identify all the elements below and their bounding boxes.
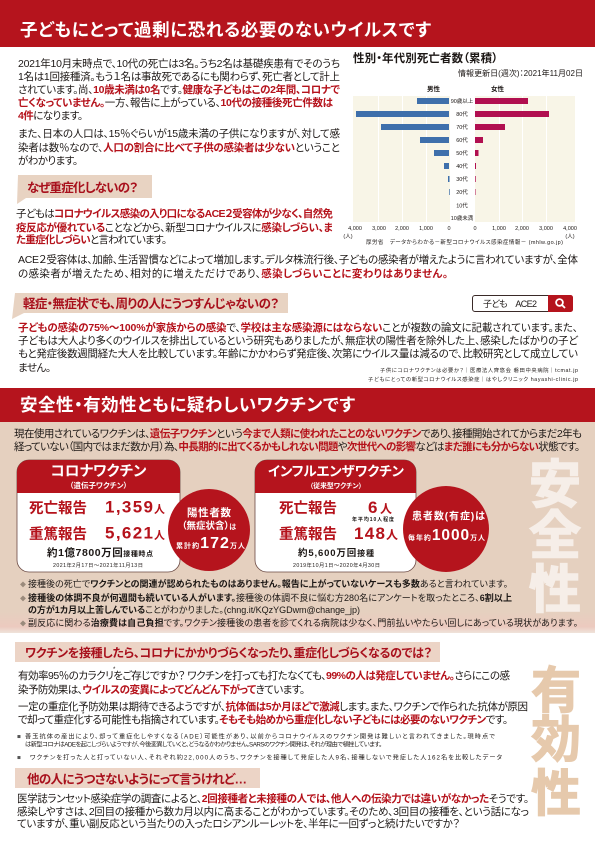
legend labels (427, 84, 504, 93)
axis labels: 0 (447, 226, 451, 232)
vertical label: safety (529, 457, 581, 620)
text block: deaths among teens: されています。尚、10歳未満は0名です。健康な子どもはこの2年間、コロナで (18, 83, 340, 96)
bubble: not to infect others (15, 768, 260, 788)
bubble: not to infect others: 他の人にうつさないようにって言うけれど… (27, 772, 247, 786)
text block: household infection: もと発症後数週間経た大人を比較しています。年齢にかかわらず発症後、次第にウイルス量は減るので、比較研究として成立してい (18, 347, 578, 360)
legend labels: 女性 (491, 84, 504, 93)
vertical label: efficacy: 性 (531, 766, 581, 822)
age labels (451, 97, 474, 222)
card: influenza vaccine: 死亡報告 (279, 499, 337, 517)
text block: population ratio: 染者は数％なので、人口の割合に比べて子供の感染者は少ないということ (18, 141, 340, 154)
card: influenza vaccine: （従来型ワクチン） (310, 481, 362, 490)
text block: deaths among teens: 1名は1回接種済。もう１名は事故死であるにも関わらず、死亡者として計上 (18, 70, 340, 83)
vertical label: safety: 安 (529, 457, 581, 515)
card: influenza vaccine: 人 (386, 528, 398, 542)
text block: household infection: 子どもの感染の75%～100%が家族からの感染で、学校は主な感染源にはならないことが複数の論文に記載されています。また、 (18, 321, 578, 334)
age labels: 10代 (456, 202, 468, 210)
vertical label: safety: 全 (529, 508, 581, 566)
circle: positive cases (168, 489, 250, 571)
text block: population ratio: また、日本の人口は、15％ぐらいが15歳未満の子供になりますが、対して感 (18, 127, 340, 140)
bullet list: vaccine concerns: 接種後の体調不良が何週間も続いている人がいます。接種後の体調不良に悩む方280名にアンケートを取ったところ、6割以上 (28, 592, 512, 603)
bullet list: vaccine concerns: ◆ (20, 621, 26, 628)
footnote markers: * (113, 667, 116, 673)
age labels: 50代 (456, 149, 468, 157)
circle: patients: 毎年約1000万人 (408, 527, 485, 544)
footnote markers (82, 667, 116, 718)
bullet list: vaccine concerns: 接種後の死亡でワクチンとの関連が認められたものはありません。報告に上がっていないケースも多数あると言われています。 (28, 578, 508, 589)
circle: positive cases: 累計約172万人 (176, 535, 245, 552)
card: corona vaccine: 人 (154, 530, 165, 542)
card: influenza vaccine: 約5,600万回接種 (298, 547, 374, 559)
circle: patients (403, 486, 489, 572)
text block: efficacy rate (18, 667, 528, 726)
age labels: 80代 (456, 110, 468, 118)
axis labels: 0 (473, 226, 477, 232)
card: influenza vaccine: 年平均10人程度 (352, 516, 394, 523)
bullet list: vaccine concerns: ◆ (20, 582, 26, 589)
text block: household infection: 子どもは大人より多くのウイルスを排出しているという研究もありましたが、無症状の陽性者を除外した上、感染したばかりの子ど (18, 334, 579, 347)
circle: positive cases: 陽性者数 (187, 506, 232, 519)
references (368, 366, 578, 383)
plot background (353, 96, 575, 222)
card: influenza vaccine: 148 (354, 524, 385, 543)
axis labels: 4,000 (563, 226, 577, 232)
chart title: 性別・年代別死亡者数（累積） (353, 51, 498, 65)
references: 子どもにとっての新型コロナウイルス感染症｜はやしクリニック hayashi-clinic.jp (368, 375, 578, 383)
text block: Lancet study (17, 792, 529, 830)
axis labels: (人) (343, 234, 353, 240)
chart source: 厚労省 データからわかる－新型コロナウイルス感染症情報－ (mhlw.go.jp) (366, 238, 563, 246)
card: corona vaccine: （遺伝子ワクチン） (70, 480, 127, 490)
axis labels: 2,000 (515, 226, 529, 232)
axis labels: 3,000 (372, 226, 386, 232)
section header: children (0, 0, 595, 47)
text block: population ratio: がわかります。 (18, 154, 78, 167)
card: influenza vaccine: 重篤報告 (279, 525, 337, 543)
card: influenza vaccine: 人 (380, 502, 392, 516)
text block: household infection: ません。 (18, 362, 51, 374)
text block: deaths among teens: 2021年10月末時点で、10代の死亡は3名。うち2名は基礎疾患有でそのうち (18, 57, 340, 70)
bubble: why not severe: なぜ重症化しないの？ (27, 180, 138, 195)
text block: ACE2 receptors in children: 疫反応が優れていることなどから、新型コロナウイルスに感染しづらい、ま (16, 221, 333, 234)
age labels: 60代 (456, 136, 468, 144)
text block: vaccine intro (14, 427, 582, 453)
card: influenza vaccine: インフルエンザワクチン (268, 464, 404, 479)
bullet list: vaccine concerns: 副反応に関わる治療費は自己負担です。ワクチン接種後の患者を診てくれる病院は少なく、門前払いやたらい回しにあっている現状があります。 (28, 617, 578, 628)
text block: efficacy rate: で却って重症化する可能性も指摘されています。そもそも始めから重症化しない子どもには必要のないワクチンです。 (18, 713, 508, 726)
chart: deaths by sex and age (343, 51, 583, 246)
icon: magnifier (556, 299, 565, 308)
bubble: does vaccine prevent severity (15, 642, 440, 662)
text block: efficacy rate: 染予防効果は、ウイルスの変異によってどんどん下がってきています。 (18, 683, 305, 696)
bullet list: vaccine concerns (20, 578, 578, 628)
card: corona vaccine: コロナワクチン (51, 463, 146, 480)
age labels: 30代 (456, 175, 468, 183)
card: influenza vaccine: 6 (368, 498, 377, 517)
text block: ACE2 and age: ACE２受容体は、加齢、生活習慣などによって増加します。デルタ株流行後、子どもの感染者が増えたように言われていますが、全体 (18, 253, 578, 266)
text block: vaccine intro: 現在使用されているワクチンは、遺伝子ワクチンという今まで人類に使われたことのないワクチンであり、接種開始されてからまだ2年も (14, 427, 582, 440)
age labels: 20代 (456, 188, 468, 196)
text block: efficacy rate: 有効率95％のカラクリをご存じですか？ ワクチンを打っても打たなくても、99%の人は発症していません。さらにこの感 (18, 669, 510, 682)
age labels: 40代 (456, 162, 468, 170)
references: 子供にコロナワクチンは必要か？｜医療法人齊悠会 磐田中央病院｜tcmat.jp (380, 366, 578, 374)
vertical label: efficacy: 有 (531, 663, 581, 719)
text block: population ratio (18, 127, 340, 167)
search box: 子ども ACE2 (483, 299, 537, 309)
bullet list: vaccine concerns: の方が1カ月以上苦しんでいることがわかりました。(chng.it/KQzYGDwm@change_jp) (28, 604, 360, 615)
text block: ACE2 and age: の感染者が増えたため、相対的に増えただけであり、感染しづらいことに変わりはありません。 (18, 267, 448, 280)
female bars (475, 98, 549, 195)
axis labels: (人) (565, 234, 575, 240)
bubble: mild cases transmit (12, 293, 288, 319)
text block: Lancet study: 感染しやすさは、2回目の接種から数カ月以内に高まることがわかっています。そのため、3回目の接種を、という話になっ (17, 805, 529, 818)
footnotes (17, 732, 502, 762)
search box (472, 295, 573, 312)
circle: patients: 患者数(有症)は (412, 510, 485, 522)
male bars (356, 98, 450, 195)
card: corona vaccine (17, 460, 180, 572)
vertical label: safety: 性 (529, 562, 581, 620)
text block: ACE2 receptors in children (16, 207, 334, 246)
footnotes: ■ (17, 734, 21, 740)
text block: ACE2 receptors in children: 子どもはコロナウイルス感染の入り口になるACE２受容体が少なく、自然免 (16, 207, 334, 220)
text block: household infection (18, 321, 579, 374)
age labels: 70代 (456, 123, 468, 131)
card: corona vaccine: 約1億7800万回接種時点 (47, 546, 153, 559)
footnotes: ワクチンを打った人と打っていない人、それぞれ約22,000人のうち、ワクチンを接種して発症した人9名、接種しないで発症した人162名を比較したデータ (30, 754, 502, 762)
section background: safety (0, 422, 595, 633)
footnotes: は新型コロナはADEを起こしづらいようですが、今後変異していくと、どうなるかわかりません。SARSのワクチン開発は、それが理由で頓挫しています。 (25, 740, 382, 748)
footnotes: 善玉抗体の産出により、却って重症化しやすくなる〔ADE〕可能性があり、以前からコロナウイルスのワクチン開発は難しいと言われてきました。現時点で (25, 732, 495, 740)
text block: ACE2 receptors in children: た重症化しづらいと言われています。 (16, 233, 167, 246)
bullet list: vaccine concerns: ◆ (20, 596, 26, 603)
text block: deaths among teens (18, 57, 340, 122)
card: corona vaccine: 5,621 (105, 524, 153, 542)
axis labels: 1,000 (419, 226, 433, 232)
section header: children: 子どもにとって過剰に恐れる必要のないウイルスです (20, 20, 431, 40)
bubble: does vaccine prevent severity: ワクチンを接種したら、コロナにかかりづらくなったり、重症化しづらくなるのでは？ (25, 645, 432, 660)
card: corona vaccine: 1,359 (105, 498, 153, 516)
bubble: mild cases transmit: 軽症・無症状でも、周りの人にうつすんじゃないの？ (23, 296, 279, 311)
axis labels: 3,000 (539, 226, 553, 232)
footnotes: ■ (17, 754, 21, 762)
axis labels: 4,000 (348, 226, 362, 232)
axis labels: 2,000 (395, 226, 409, 232)
axis labels: 1,000 (492, 226, 506, 232)
axis labels (343, 226, 577, 240)
text block: Lancet study: ていますが、重い副反応という当たりの入ったロシアンルーレットを、半年に一回ずっと続けたいですか？ (17, 817, 460, 830)
vertical label: efficacy (531, 663, 581, 822)
bubble: why not severe (17, 175, 152, 204)
text block: ACE2 and age (18, 253, 578, 280)
card: corona vaccine: 2021年2月17日〜2021年11月13日 (53, 561, 143, 569)
text block: Lancet study: 医学誌ランセット感染症学の調査によると、2回接種者と未接種の人では、他人への伝染力では違いがなかったそうです。 (17, 792, 529, 805)
card: corona vaccine: 重篤報告 (29, 525, 87, 543)
text block: deaths among teens: 亡くなっていません。一方、報告に上がっている、10代の接種後死亡件数は (18, 96, 334, 109)
age labels: 10歳未満 (451, 214, 474, 222)
text block: deaths among teens: 4件になります。 (18, 109, 83, 122)
card: corona vaccine: 死亡報告 (29, 499, 87, 517)
card: corona vaccine: 人 (154, 504, 165, 516)
footnote markers: * (82, 712, 85, 718)
section header: vaccine: 安全性・有効性ともに疑わしいワクチンです (20, 395, 355, 415)
text block: vaccine intro: 経っていない（国内ではまだ数か月）為、中長期的に出てくるかもしれない問題や次世代への影響などはまだ誰にも分からない状態です。 (14, 440, 580, 453)
section header: vaccine (0, 388, 595, 422)
age labels: 90歳以上 (451, 97, 474, 105)
card: influenza vaccine: 2019年10月1日〜2020年4月30日 (293, 561, 380, 569)
card: influenza vaccine (255, 460, 416, 572)
legend labels: 男性 (427, 84, 440, 93)
vertical label: efficacy: 効 (531, 712, 581, 768)
text block: efficacy rate: 一定の重症化予防効果は期待できるようですが、抗体価は5か月ほどで激減します。また、ワクチンで作られた抗体が原因 (18, 700, 528, 713)
circle: positive cases: （無症状含）は (182, 520, 236, 532)
update date: 情報更新日(週次)：2021年11月02日 (458, 68, 583, 78)
